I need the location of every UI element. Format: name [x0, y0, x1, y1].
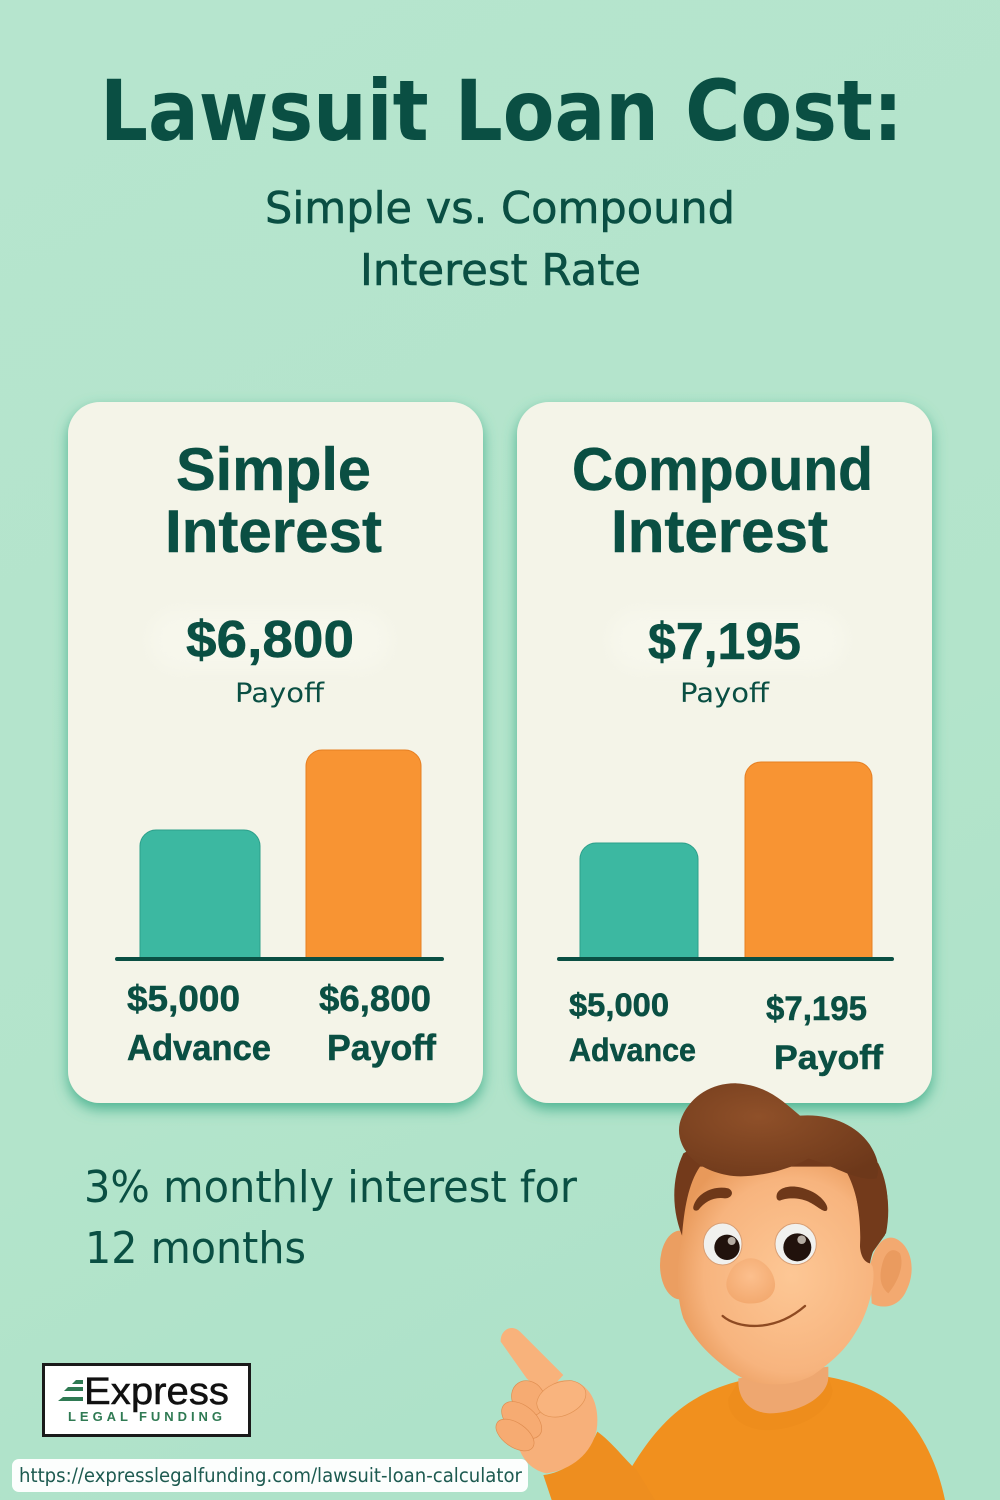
bar: payoff — [745, 762, 872, 958]
sweater body — [627, 1377, 945, 1500]
label: payoff: Payoff — [774, 1039, 884, 1077]
card background — [68, 402, 483, 1103]
logo tagline — [68, 1409, 222, 1424]
panel: compound interest — [517, 402, 932, 1103]
payoff amount: Payoff — [680, 678, 770, 709]
logo wordmark: Express — [84, 1371, 229, 1413]
subtitle — [265, 183, 735, 296]
title: Lawsuit Loan Cost: — [100, 62, 903, 160]
face — [678, 1167, 874, 1384]
label: advance — [127, 978, 271, 1068]
logo: Express Legal Funding — [44, 1364, 250, 1436]
text block: interest terms — [84, 1162, 578, 1274]
bar: payoff — [306, 750, 421, 958]
hand — [490, 1328, 597, 1473]
thumb — [537, 1381, 586, 1417]
subtitle: Simple vs. Compound — [265, 183, 735, 234]
payoff amount: $7,195 — [648, 613, 801, 671]
left eye — [703, 1223, 742, 1265]
sleeve — [543, 1432, 655, 1500]
text block: interest terms: 3% monthly interest for — [84, 1162, 578, 1213]
label: advance: $5,000 — [569, 987, 669, 1023]
heading: compound interest — [572, 436, 873, 565]
label: advance: Advance — [127, 1027, 271, 1068]
hair quiff — [679, 1083, 878, 1179]
character: pointing man — [490, 1083, 945, 1500]
axis line — [115, 957, 444, 961]
bar: advance — [580, 843, 698, 958]
label: advance — [569, 987, 696, 1068]
palm — [517, 1380, 597, 1473]
label: payoff: Payoff — [327, 1027, 437, 1068]
card background — [517, 402, 932, 1103]
label: advance: $5,000 — [127, 978, 240, 1019]
label: payoff: $7,195 — [766, 990, 867, 1028]
logo tagline: FUNDING — [139, 1409, 222, 1424]
right eye — [775, 1223, 816, 1265]
subtitle: Interest Rate — [360, 245, 641, 296]
heading: simple interest: Interest — [165, 498, 382, 565]
payoff amount: $6,800 — [186, 611, 354, 669]
eyebrows — [693, 1188, 732, 1211]
heading: compound interest: Compound — [572, 436, 873, 503]
label: payoff — [319, 978, 437, 1068]
hair back — [674, 1137, 888, 1270]
logo tagline: LEGAL — [68, 1409, 128, 1424]
index finger — [501, 1328, 563, 1395]
neck — [738, 1367, 828, 1413]
source link — [12, 1459, 528, 1492]
label: advance: Advance — [569, 1032, 696, 1068]
logo box — [44, 1364, 250, 1436]
label: payoff: $6,800 — [319, 978, 431, 1019]
link background — [12, 1459, 528, 1492]
right ear — [870, 1238, 912, 1307]
bar chart: compound interest — [557, 762, 894, 1077]
collar — [728, 1377, 833, 1430]
payoff amount: Payoff — [235, 678, 325, 709]
folded fingers — [490, 1374, 552, 1457]
left ear — [660, 1231, 700, 1299]
axis line — [557, 957, 894, 961]
payoff amount — [150, 610, 390, 709]
bar chart: simple interest — [115, 750, 444, 1068]
heading: simple interest — [165, 436, 382, 565]
panel: simple interest — [68, 402, 483, 1103]
icon: logo stripes — [58, 1380, 83, 1401]
label: payoff — [766, 990, 884, 1077]
text block: interest terms: 12 months — [85, 1223, 306, 1274]
heading: compound interest: Interest — [611, 498, 828, 565]
right sideburn — [843, 1163, 888, 1263]
link text: https://expresslegalfunding.com/lawsuit-loan-calculator — [19, 1464, 523, 1487]
mouth — [723, 1306, 805, 1326]
nose — [726, 1258, 775, 1304]
payoff amount — [610, 610, 845, 709]
bar: advance — [140, 830, 260, 958]
heading: simple interest: Simple — [176, 436, 371, 503]
